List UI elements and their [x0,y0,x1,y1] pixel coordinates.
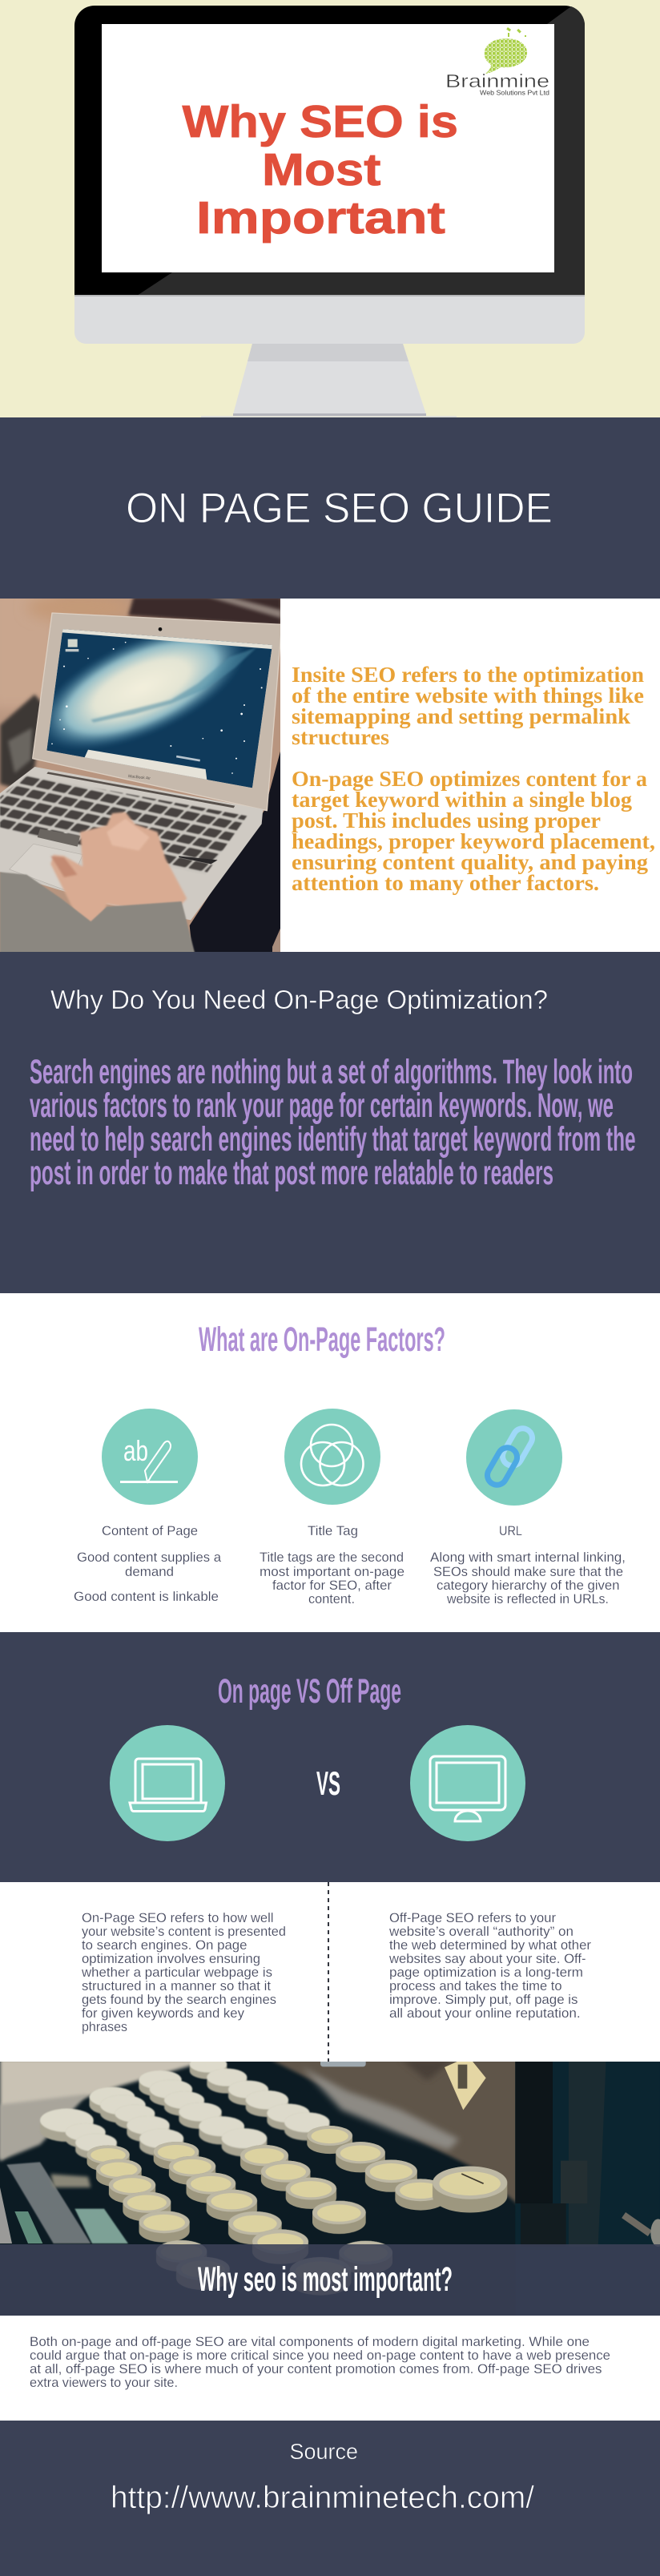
on-page description: structured in a manner so that it [82,1979,271,1993]
title [183,96,458,244]
On-page SEO paragraph: attention to many other factors. [292,871,599,895]
description: Along with smart internal linking, [430,1550,626,1565]
right side dark panels [515,2062,660,2244]
on-page description: your website’s content is presented [82,1925,286,1939]
Insite SEO paragraph: structures [292,725,389,749]
icon: desktop monitor [410,1725,525,1841]
description [430,1550,626,1606]
monitor stand [201,344,457,417]
on-page description: for given keywords and key [82,2006,245,2021]
title: Important [196,192,445,244]
photo background [0,587,282,953]
side knob [622,2212,660,2247]
label: Title Tag [308,1524,358,1538]
section paragraph [30,1053,636,1192]
on-page description: On-Page SEO refers to how well [82,1911,274,1925]
description: website is reflected in URLs. [446,1592,609,1606]
summary paragraph: Both on-page and off-page SEO are vital components of modern digital marketing. While one [30,2335,590,2349]
icon: text and pencil [102,1409,198,1505]
Insite SEO paragraph: of the entire website with things like [292,683,644,707]
summary paragraph [30,2335,610,2390]
icon: chain link [466,1409,562,1506]
off-page description: all about your online reputation. [389,2006,581,2021]
factors heading: What are On-Page Factors? [199,1320,445,1359]
typewriter illustration [0,2056,660,2318]
on-page description: gets found by the search engines [82,1993,276,2007]
source label: Source [290,2439,358,2464]
logo bubble icon [485,27,527,74]
badge [445,2057,486,2110]
logo: Brainmine [445,27,549,97]
panel: laptop photo [0,587,282,953]
section heading: Why Do You Need On-Page Optimization? [50,985,548,1014]
metal body [270,2059,523,2209]
sleeve [0,872,195,953]
description: factor for SEO, after [272,1578,392,1593]
icon: venn circles [284,1409,380,1505]
description: content. [308,1592,355,1606]
laptop base: MacBook Air [128,774,151,781]
VS label: VS [316,1764,340,1802]
title: Why SEO is [183,96,458,147]
monitor screen [102,24,554,272]
big dial key [395,2167,507,2213]
on-page description: to search engines. On page [82,1938,247,1953]
off-page description: process and takes the time to [389,1979,562,1993]
summary paragraph: extra viewers to your site. [30,2376,178,2390]
panel: on page vs off page [0,1632,660,1882]
panel: guide banner [0,417,660,599]
description [74,1550,222,1604]
factor: content of page [74,1409,222,1604]
laptop camera [159,627,162,631]
off-page description: Off-Page SEO refers to your [389,1911,557,1925]
title: Most [262,144,381,196]
On-page SEO paragraph: target keyword within a single blog [292,788,633,812]
off-page description: website’s overall “authority” on [388,1925,573,1939]
off-page description: page optimization is a long-term [389,1965,583,1980]
On-page SEO paragraph [292,767,655,895]
panel: typewriter photo [0,2056,660,2318]
label: URL [499,1524,522,1538]
Insite SEO paragraph [292,663,644,749]
comparison heading: On page VS Off Page [218,1672,401,1711]
factor: title tag [260,1409,404,1606]
panel: on-page factors [0,1293,660,1632]
laptop lid [33,613,282,811]
carriage bars [0,2187,12,2243]
off-page description: websites say about your site. Off- [388,1952,586,1966]
Insite SEO paragraph: sitemapping and setting permalink [292,704,630,728]
monitor chin [74,296,585,344]
logo name: Brainmine [445,71,549,91]
description: SEOs should make sure that the [433,1565,623,1579]
source URL: http://www.brainminetech.com/ [111,2481,534,2515]
On-page SEO paragraph: ensuring content quality, and paying [292,850,649,874]
panel: comparison text [0,1882,660,2062]
description: Title tags are the second [260,1550,404,1565]
off-page description [388,1911,591,2021]
description [260,1550,404,1606]
factor: URL [430,1409,626,1606]
hand [50,812,187,928]
on-page description [81,1911,286,2034]
label: Content of Page [102,1524,198,1538]
description: demand [125,1565,174,1579]
panel: intro text [280,599,660,952]
off-page description: improve. Simply put, off page is [389,1993,578,2007]
On-page SEO paragraph: headings, proper keyword placement, [292,829,655,853]
on-page description: phrases [82,2020,127,2034]
logo tagline: Web Solutions Pvt Ltd [480,89,549,97]
panel: source footer [0,2421,660,2576]
icon: text and pencil: ab [123,1434,148,1467]
icon: laptop [110,1725,225,1841]
on-page description: optimization involves ensuring [82,1952,260,1966]
description: Good content is linkable [74,1590,219,1604]
laptop base [0,767,263,920]
photo heading: Why seo is most important? [198,2260,453,2299]
on-page description: whether a particular webpage is [81,1965,272,1980]
laptop screen [46,629,272,788]
front keys [307,2126,352,2154]
summary paragraph: could argue that on-page is more critical since you need on-page content to have a web presence [30,2348,610,2363]
On-page SEO paragraph: On-page SEO optimizes content for a [292,767,648,791]
Insite SEO paragraph: Insite SEO refers to the optimization [292,663,644,687]
panel: why on-page optimization [0,952,660,1293]
summary paragraph: at all, off-page SEO is where much of your content promotion comes from. Off-page SEO drives [30,2362,602,2376]
overlay band [0,2244,660,2316]
guide heading: ON PAGE SEO GUIDE [126,485,553,532]
description: category hierarchy of the given [437,1578,620,1593]
panel: monitor hero [0,0,660,417]
On-page SEO paragraph: post. This includes using proper [292,808,601,832]
monitor bezel [74,6,585,296]
description: Good content supplies a [77,1550,222,1565]
off-page description: the web determined by what other [389,1938,591,1953]
description: most important on-page [260,1565,404,1579]
blurred keys [40,2056,330,2159]
panel: summary text [0,2316,660,2421]
